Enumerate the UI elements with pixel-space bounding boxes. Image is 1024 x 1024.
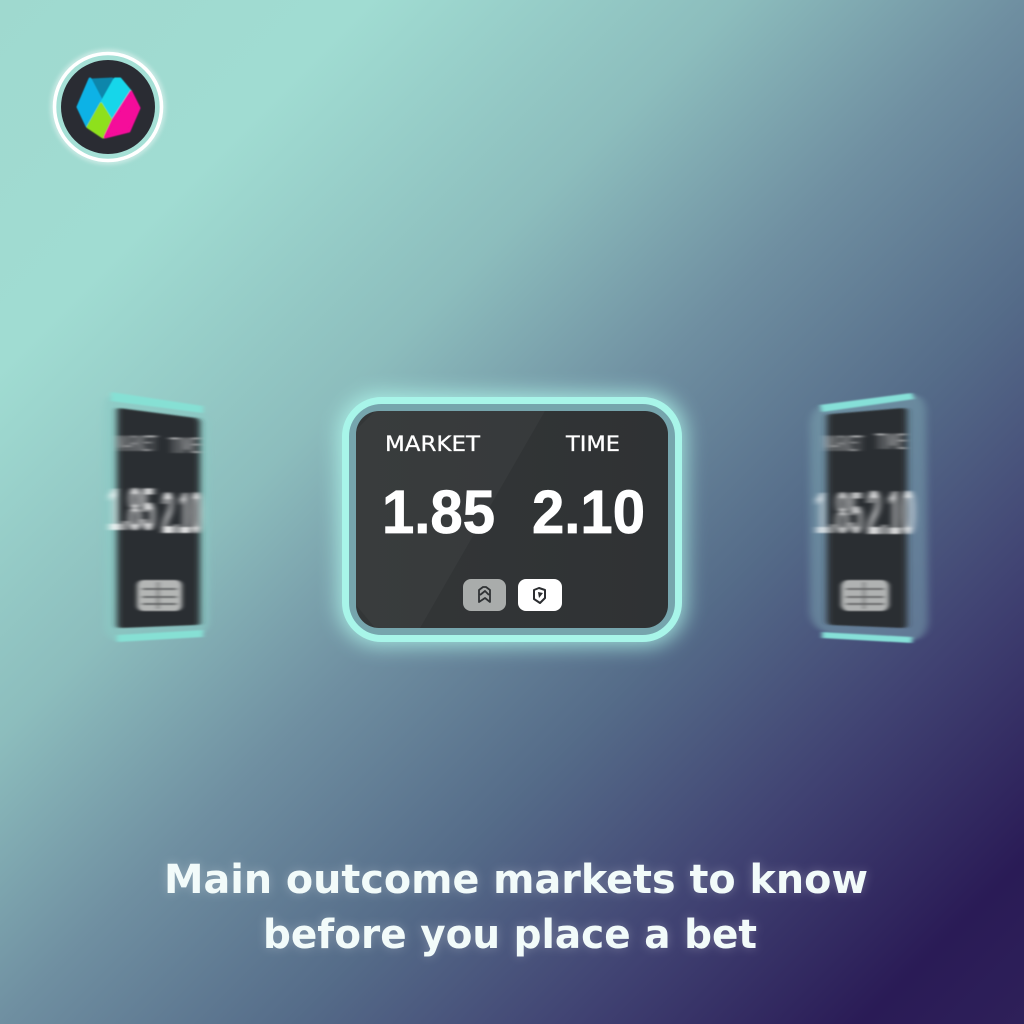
left blurred odds card <box>104 392 209 642</box>
card dark panel <box>356 411 668 628</box>
title: Main outcome markets to know <box>164 857 868 903</box>
button: active time <box>518 579 562 611</box>
infographic canvas: 2.10 <box>162 481 202 546</box>
card glow <box>338 393 686 646</box>
title <box>164 857 868 958</box>
left card labels and odds <box>108 432 202 546</box>
right card blurred buttons <box>841 580 889 611</box>
right card labels and odds: MARKET <box>824 432 862 456</box>
label: market: MARKET <box>385 432 480 456</box>
center odds card <box>338 393 686 646</box>
right blurred odds card: 2.10 <box>867 479 915 548</box>
right card labels and odds: TIME <box>875 430 906 454</box>
right card labels and odds: 1.85 <box>815 481 863 546</box>
left card blurred buttons <box>137 580 182 611</box>
left card labels and odds: MARKET <box>116 432 156 456</box>
label: time: TIME <box>565 432 620 456</box>
title: before you place a bet <box>263 912 757 958</box>
right card labels and odds <box>815 430 915 548</box>
odds value 1.85: 1.85 <box>382 478 495 546</box>
title: Main outcome markets to know <box>164 857 868 903</box>
title: before you place a bet <box>263 912 757 958</box>
odds value 2.10: 2.10 <box>532 478 645 546</box>
right blurred odds card <box>810 393 928 643</box>
button: inactive market <box>463 579 506 611</box>
icon: multicolour hexagon mark <box>78 79 139 137</box>
left card labels and odds: TIME <box>169 434 200 458</box>
logo badge <box>53 52 163 162</box>
left card labels and odds: 1.85 <box>108 476 155 543</box>
